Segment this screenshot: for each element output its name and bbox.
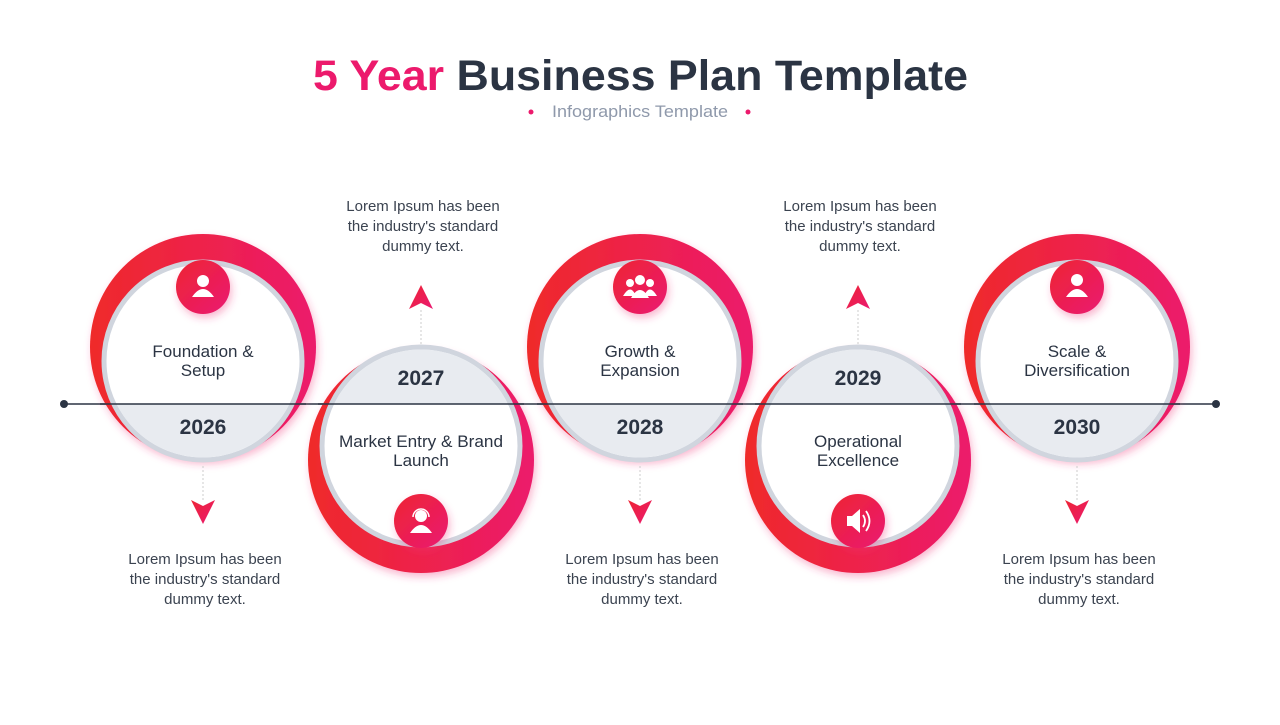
text 2029: the industry's standard: [785, 218, 935, 235]
text 2029: Lorem Ipsum has been: [783, 198, 937, 215]
arrow down 2030: [1065, 466, 1089, 524]
step 2026: Setup: [181, 361, 225, 380]
text 2026: [128, 551, 282, 608]
text 2027: [346, 198, 500, 255]
title: 5 Year Business Plan Template: [313, 52, 968, 100]
text 2027: the industry's standard: [348, 218, 498, 235]
step 2026: [90, 234, 316, 460]
text 2030: [1002, 551, 1156, 608]
text 2030: dummy text.: [1038, 591, 1120, 608]
text 2030: Lorem Ipsum has been: [1002, 551, 1156, 568]
step 2030: 2030: [1054, 416, 1100, 439]
step 2029: Operational: [814, 432, 902, 451]
text 2026: dummy text.: [164, 591, 246, 608]
arrow up 2029: [846, 285, 870, 345]
text 2028: Lorem Ipsum has been: [565, 551, 719, 568]
arrow down 2028: [628, 466, 652, 524]
step 2030: Diversification: [1024, 361, 1130, 380]
step 2027: 2027: [398, 367, 444, 390]
text 2026: Lorem Ipsum has been: [128, 551, 282, 568]
step 2028: Growth &: [605, 342, 676, 361]
step 2027: Market Entry & Brand: [339, 432, 503, 451]
text 2026: the industry's standard: [130, 571, 280, 588]
text 2027: Lorem Ipsum has been: [346, 198, 500, 215]
text 2029: [783, 198, 937, 255]
step 2027: Launch: [393, 451, 449, 470]
step 2028: Expansion: [600, 361, 680, 380]
step 2026: Foundation &: [152, 342, 254, 361]
text 2028: the industry's standard: [567, 571, 717, 588]
text 2027: dummy text.: [382, 238, 464, 255]
step 2028: 2028: [617, 416, 664, 439]
step 2029: 2029: [835, 367, 881, 390]
step 2028: [527, 234, 753, 460]
step 2027: [308, 347, 534, 573]
arrow up 2027: [409, 285, 433, 345]
text 2028: [565, 551, 719, 608]
arrow down 2026: [191, 466, 215, 524]
step 2030: [964, 234, 1190, 460]
step 2026: 2026: [180, 416, 226, 439]
step 2029: Excellence: [817, 451, 899, 470]
text 2028: dummy text.: [601, 591, 683, 608]
subtitle: Infographics Template: [552, 103, 728, 121]
text 2030: the industry's standard: [1004, 571, 1154, 588]
step 2030: Scale &: [1048, 342, 1107, 361]
text 2029: dummy text.: [819, 238, 901, 255]
timeline line: [60, 400, 1220, 408]
step 2029: [745, 347, 971, 573]
